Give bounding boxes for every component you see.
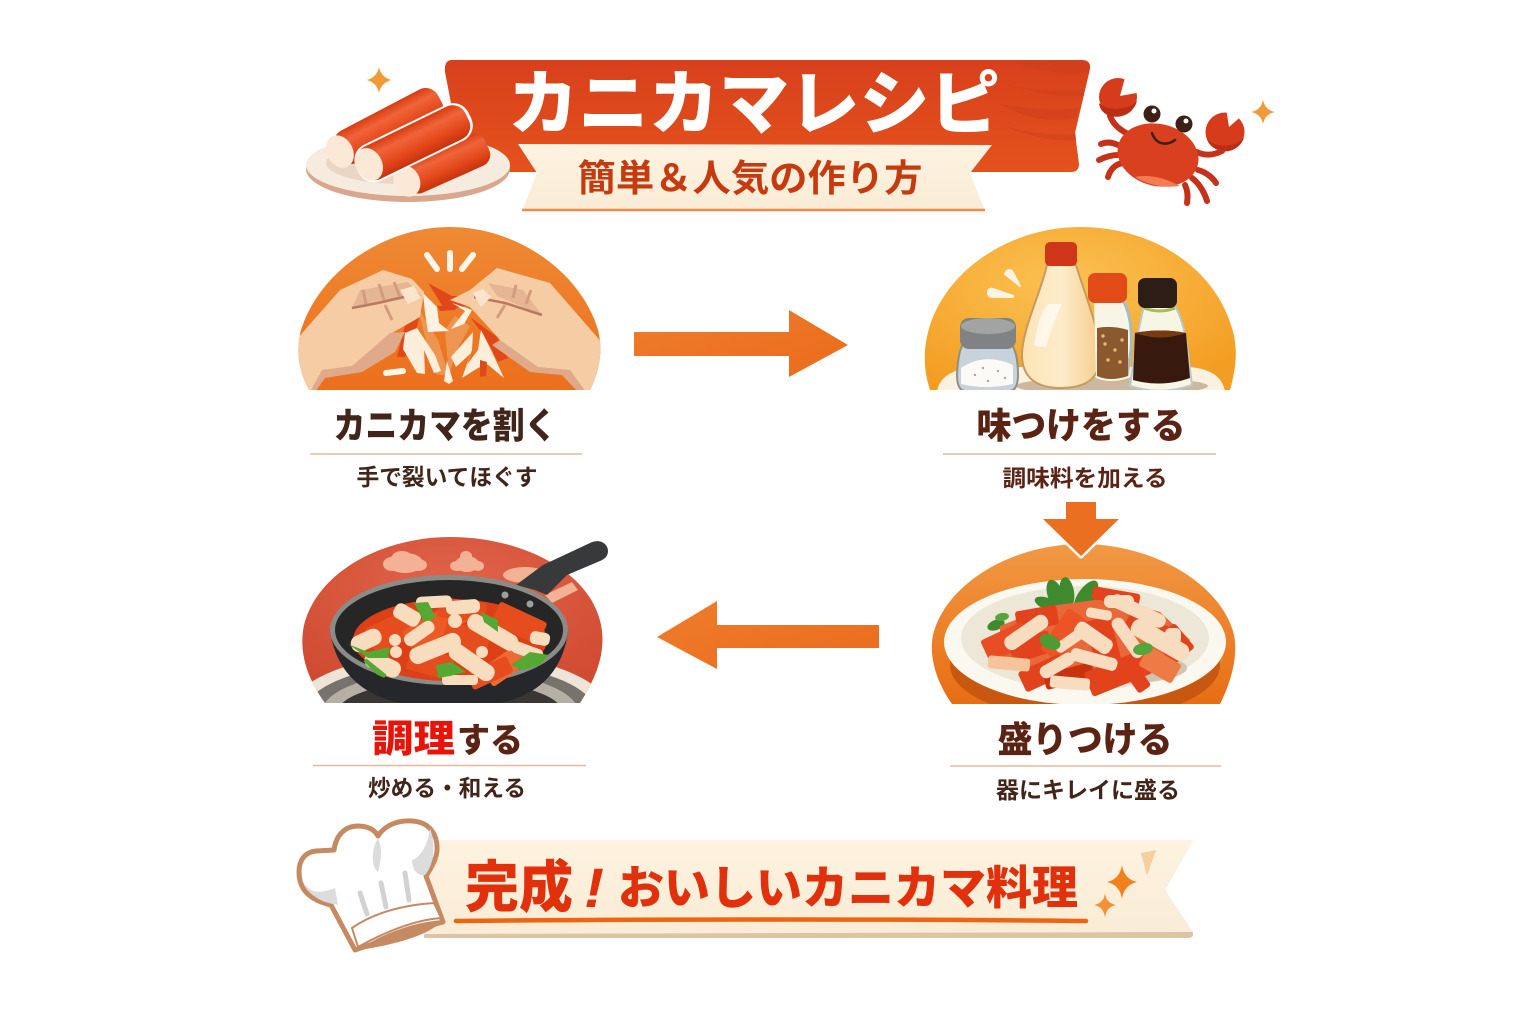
title banner xyxy=(445,60,1090,172)
icon: pepper jar xyxy=(1088,273,1132,381)
arrow: step 2 to 4 xyxy=(1043,502,1119,556)
arrow: step 4 to 3 xyxy=(657,601,879,669)
icon: mayo bottle xyxy=(1022,242,1100,388)
heading: step 2: 味つけをする xyxy=(976,405,1186,446)
arrow: step 1 to 2 xyxy=(634,310,848,377)
icon: crab sticks on plate xyxy=(306,83,510,202)
icon: sparkle left xyxy=(367,67,391,93)
icon: salt shaker xyxy=(957,318,1018,391)
text: step 2 description: 調味料を加える xyxy=(1002,465,1168,491)
icon: stir fry in pan xyxy=(348,595,551,690)
icon: plated stir fry xyxy=(980,586,1195,697)
text: step 1 description: 手で裂いてほぐす xyxy=(356,464,538,490)
subtitle ribbon xyxy=(518,144,992,211)
subtitle text: 簡単＆人気の作り方 xyxy=(578,158,922,199)
icon: burner xyxy=(312,667,591,703)
heading: step 3: する xyxy=(457,722,523,760)
icon: accent lines xyxy=(988,270,1020,297)
text: step 4 description: 器にキレイに盛る xyxy=(996,777,1180,803)
icon: sparkle right xyxy=(1251,100,1275,124)
completion text xyxy=(465,856,1078,919)
underline xyxy=(456,920,1086,921)
panel: step 2 illustration xyxy=(920,225,1240,395)
icon: shredded crab stick xyxy=(397,283,508,384)
heading: step 3 xyxy=(372,719,523,761)
panel: step 3 illustration (cooking) xyxy=(302,537,608,703)
icon: steam clouds xyxy=(383,551,578,603)
icon: right hand xyxy=(450,268,604,392)
heading: step 4: 盛りつける xyxy=(998,719,1172,760)
heading: step 3: 調理 xyxy=(372,719,455,761)
banner: completion xyxy=(424,840,1193,938)
icon: plate xyxy=(944,579,1226,705)
icon: frying pan xyxy=(330,541,608,703)
completion text: おいしいカニカマ料理 xyxy=(618,862,1078,914)
icon: soy sauce bottle xyxy=(1130,278,1192,391)
icon: left hand xyxy=(296,270,424,392)
heading: step 1: カニカマを割く xyxy=(334,405,556,446)
completion text: ! xyxy=(584,856,604,919)
panel: step 4 illustration (plating) xyxy=(932,544,1236,704)
icon: sparkles xyxy=(1094,850,1156,918)
icon: snap lines xyxy=(386,253,473,373)
title text: カニカマレシピ xyxy=(508,65,1000,143)
panel: step 1 illustration xyxy=(295,225,605,392)
text: step 3 description: 炒める・和える xyxy=(368,775,526,801)
icon: crab xyxy=(1099,74,1245,203)
icon: chef hat xyxy=(299,821,443,950)
icon: garnish leaves xyxy=(987,577,1098,631)
completion text: 完成 xyxy=(465,856,573,919)
